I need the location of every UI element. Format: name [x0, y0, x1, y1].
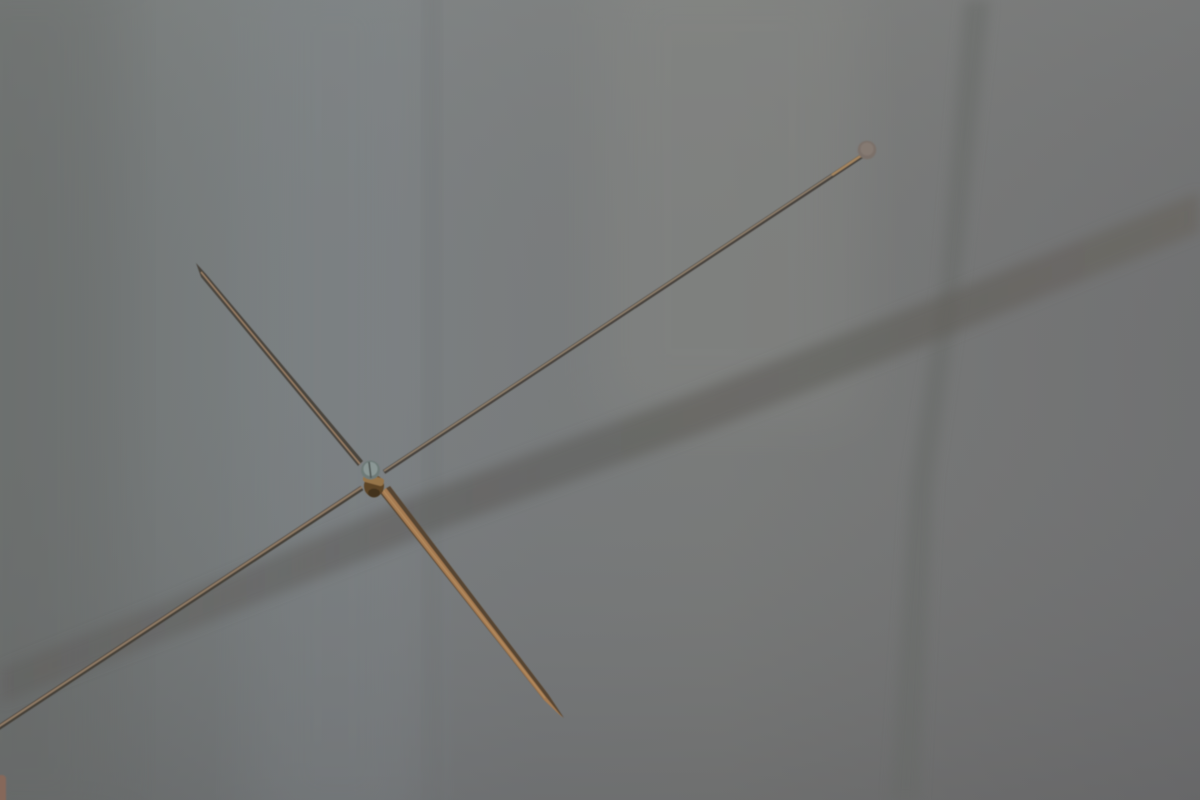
- needle: short crossing pin, lower section: [380, 486, 564, 718]
- shadow: long pin diagonal shadow: [0, 192, 1200, 704]
- pivot: brass collar and screw head: [361, 460, 385, 498]
- shadow: wall seam vertical: [890, 0, 990, 800]
- pin head: round ball: [858, 141, 876, 159]
- corner: blurred object at bottom left: [0, 775, 6, 800]
- needle: short crossing pin, upper section: [196, 263, 363, 466]
- pin: long pin with round head: [0, 155, 862, 728]
